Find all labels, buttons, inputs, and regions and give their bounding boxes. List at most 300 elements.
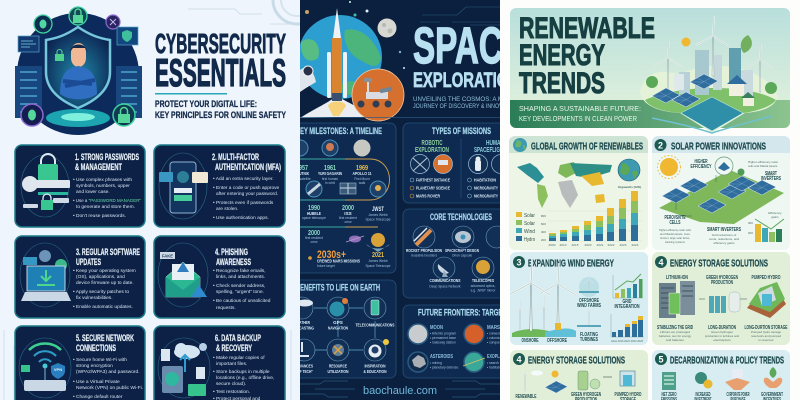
callouts: costs, reductions, and [709,237,739,241]
labels: row two: first resident [339,216,357,220]
target: asteroids: ASTEROIDS [430,354,453,360]
offshore and floating labels: OFFSHORE [579,298,599,304]
title: space exploration [413,26,500,88]
hydrogen production: Green hydrogen [711,330,733,334]
callouts: efficiency gains [713,241,735,245]
offshore and floating labels: FLOATING [580,332,598,338]
subtitle: JOURNEY OF DISCOVERY & INNOVATION [413,103,518,110]
labels: row three: 2030s+ [317,249,346,261]
labels: benefits: OFF TECH" [295,369,313,374]
stacked bar chart: 2020 [585,243,592,247]
heading [75,153,139,170]
pumped hydro: reservoirs and pumped [751,334,781,338]
stacked bar chart: 800 [541,214,546,218]
heading [215,334,261,352]
title: cybersecurity essentials: ESSENTIALS [155,52,286,95]
panel: space exploration [300,0,500,400]
labels: benefits: RESOURCE [329,364,347,368]
number badge: 4 [516,354,522,364]
bullet list: • Enable automatic updates. [73,304,133,310]
stacked bar chart: 2000 [549,243,556,247]
robotic exploration: PLANETARY SCIENCE [416,186,450,190]
title [519,12,655,100]
target: asteroids: • planetary defense [430,366,458,370]
stacked bar chart: 2021 [597,243,604,247]
subtitle: KEY PRINCIPLES FOR ONLINE SAFETY [155,110,286,121]
labels: technologies: advanced optics, [471,284,495,288]
illustration: earth, rocket, moon, mars [298,8,404,121]
title: cybersecurity essentials: CYBERSECURITY [155,28,286,59]
labels: row one: SPUTNIK [295,171,309,176]
target: exoplanets: • search [487,361,499,365]
callouts: SMART INVERTERS [707,227,741,233]
turbines illustration: ONSHORE [522,338,539,344]
labels: benefits: GPS [333,320,343,325]
hydrogen production: production in turbines and [705,334,739,338]
illustration: shield and person [15,7,142,135]
icon: globe [513,138,527,152]
panel: phishing awareness [154,236,285,318]
heading: UPDATES [76,257,101,267]
heading: & MANAGEMENT [75,162,122,172]
bullet list: • Change default router [73,394,123,400]
heading: BENEFITS TO LIFE ON EARTH [296,282,380,292]
hydrogen production: electrolyzers [713,338,731,342]
robotic exploration: EXPLORATION [415,147,449,154]
title: space exploration: EXPLORATION [413,69,519,92]
bullet list [73,177,141,219]
target: exoplanets: EXOPLANETS [487,354,512,360]
bullet list [213,355,274,400]
efficiency bar chart: gains [771,215,779,219]
heading: & RECOVERY [216,343,252,353]
heading [76,248,140,266]
target: exoplanets: • habitable [487,366,503,370]
labels: row two: space telescope [302,216,326,220]
labels: row two [302,205,391,224]
labels: row one: walk [359,181,366,185]
stacked bar chart: 2010 [560,243,567,247]
bullet list: • Use authentication apps. [213,215,269,221]
number badge: 5 [658,354,664,364]
labels: row two: HUBBLE [307,211,321,216]
efficiency bar chart: Efficiency [768,211,782,215]
heading: 3. REGULAR SOFTWARE [76,247,140,257]
labels: technologies: e.g. JWST mirror [471,288,496,292]
labels: technologies: Orion capsule [452,254,472,258]
efficiency bar chart: 400 [748,221,753,225]
subtitle [413,96,500,108]
labels: row two: Space Telescope [365,218,391,222]
labels: technologies: COMMUNICATIONS [430,278,460,283]
icons and labels: CORPORATE POWER [726,392,750,398]
human spaceflight: HABITATION [474,178,497,182]
panel: types of missions [403,123,518,203]
labels: row two: ISS [344,211,352,216]
bullet list: (WPA2/WPA3) and password. [76,369,140,375]
heading: AUTHENTICATION (MFA) [215,162,281,172]
icon: padlock and key [21,154,70,217]
labels: row one: first satellite [293,177,311,181]
title: TRENDS [519,67,605,100]
labels: row three: James Webb [368,259,388,263]
target: mars: • colonization [487,336,507,340]
heading [76,334,134,352]
icons and labels: GOVERNMENT [761,392,783,398]
subtitle: UNVEILING THE COSMOS: A MULTI- [413,96,518,103]
labels: benefits: TELECOMMUNICATIONS [356,322,394,328]
labels: benefits: WEATHER [294,320,310,325]
stacked bar chart: 2015 [572,243,579,247]
bullet list [73,268,136,310]
turbines illustration [511,259,576,344]
bullet list: device firmware up to date. [76,280,134,286]
icons and labels [516,366,642,400]
world map [517,159,640,208]
stacked bar chart: 400 [541,230,546,234]
lithium ion battery racks: Lithium-ion prolonged [660,330,690,334]
heading: GLOBAL GROWTH OF RENEWABLES [531,142,643,152]
stacked bar chart: 2022 [608,243,615,247]
labels: technologies: Deep Space Network [429,284,461,288]
lithium ion battery racks: STABILIZING THE GRID [657,325,693,331]
offshore and floating labels [577,274,601,343]
bullet list: to generate and store them. [76,204,135,210]
bullet list: • Apply security patches to [73,289,129,295]
target: moon [408,324,457,344]
labels: row one: YURI GAGARIN [318,171,342,176]
pumped hydro: PUMPED HYDRO [752,275,781,281]
icon: code screen left [18,36,39,52]
icon: phishing email: FAKE [162,254,173,258]
heading: CONNECTIONS [76,343,116,353]
labels: row two: James Webb [368,213,388,217]
stacked bar chart [541,185,642,247]
callouts: horizon, large solar farms, [660,236,690,240]
bullet list: • Use a "PASSWORD MANAGER" [73,198,141,204]
bullet list: • Secure home Wi-Fi with [73,357,127,363]
lithium ion battery racks: and batteries [666,338,684,342]
bullet list: links, and attachments. [216,274,265,280]
labels: technologies: TELESCOPES [472,278,494,283]
subtitle: KEY DEVELOPMENTS IN CLEAN POWER [519,114,637,123]
number badge: 4 [658,258,664,268]
lithium ion battery racks [657,275,695,342]
subtitle: PROTECT YOUR DIGITAL LIFE: [155,99,257,110]
bullet list: spelling, "urgent" tone. [216,289,264,295]
card: solar power innovations [652,136,790,250]
efficiency bar chart [748,211,784,242]
subtitle: SHAPING A SUSTAINABLE FUTURE: [519,104,641,113]
icon: laptop and gears [20,243,71,307]
icons: technologies [413,226,508,279]
efficiency bar chart: 200 [748,231,753,235]
bullet list: • Use complex phrases with [73,177,132,183]
labels: benefits: INSPIRATION [364,364,386,368]
stacked bar chart: 2024 [632,243,639,247]
card: energy storage bottom [510,350,648,400]
legend: Solar [524,213,535,219]
icon: lock top [69,7,87,25]
heading: CORE TECHNOLOGIES [430,212,492,222]
labels: benefits: FORECASTING [290,326,314,330]
bullet list: and lower case. [76,189,110,195]
labels: technologies: reusable boosters [411,254,437,258]
stacked bar chart: 2023 [620,243,627,247]
callouts: INVERTERS [761,176,781,182]
callouts [659,159,781,245]
wind capacity chart: Glow 2016 2021 2023 2025 [611,339,643,343]
bullet list [73,357,143,400]
panel: renewable energy trends [500,0,800,400]
callouts: tracking systems [665,240,685,244]
callouts: cells and bifacial panels. [748,164,778,168]
hydrogen production: PRODUCTION [711,280,733,286]
legend: Wind [524,229,535,235]
icon: lock on shield [55,50,64,61]
panel: secure network [15,326,145,400]
hydrogen production: GREEN HYDROGEN [706,275,738,281]
number badge: 2 [658,140,663,150]
subtitle [155,100,286,118]
labels: row three: future target [317,264,335,268]
target: moon: MOON [430,325,443,331]
title: cybersecurity essentials [155,28,286,95]
callouts: and bifacial panels, more [660,232,690,236]
panel: key milestones timeline [285,123,396,273]
target: moon: • permanent base [430,336,456,340]
bullet list: • Keep your operating system [73,268,136,274]
human spaceflight: MICROGRAVITY [474,186,498,190]
heading: 1. STRONG PASSWORDS [75,152,139,162]
bullet list: fix vulnerabilities. [76,295,113,301]
subtitle [519,104,641,123]
hydrogen production [705,275,740,342]
card: global growth of renewables [509,136,648,250]
header banner [510,8,790,133]
card: energy storage top [652,252,790,345]
callouts: SMART [765,171,777,177]
icons: benefits [291,297,389,361]
grid integration chart: INTEGRATION [614,304,640,310]
labels: row two: crew [345,220,352,224]
robotic exploration: MARS ROVER [416,194,441,198]
panel: benefits to life on earth [285,280,396,378]
callouts: Grid reductions of [712,233,736,237]
heading: 2. MULTI-FACTOR [212,152,259,162]
target: mars: MARS [487,325,500,331]
labels: benefits: & EDUCATION [364,369,387,374]
icons and labels: NET ZERO [662,392,677,398]
offshore and floating labels: WIND FARMS [577,303,601,309]
bullet list: strong encryption [76,363,113,369]
bullet list: • Check sender address, [213,283,265,289]
target: mars [464,324,507,344]
legend: Solar [524,221,535,227]
labels: row two: 2000 [342,205,354,212]
bullet list: requests. [216,305,236,311]
illustration: green city with turbines [640,16,778,133]
labels: row one [293,165,372,185]
labels: benefits: ADVANCES [295,364,313,368]
icons and labels: GREEN HYDROGEN [571,392,601,398]
icons and labels: RENEWABLE [516,394,537,400]
heading [215,248,251,266]
grid integration chart [613,274,643,310]
panel: future frontiers [403,305,518,378]
icon: bug top [34,15,52,33]
bullet list: • Be cautious of unsolicited [213,298,271,304]
panel: core technologies [403,209,518,298]
icon: screen top right [117,27,138,45]
icon: wifi router: VPN [54,367,62,372]
icons and labels: INCREASED [696,392,711,398]
target: mars: • crewed [487,332,500,336]
callouts: HIGHER [694,159,708,165]
target: asteroids [408,352,458,372]
icon: cloud backup and drive [158,338,210,398]
bullet list: symbols, numbers, upper [76,183,130,189]
heading: 4. PHISHING [215,247,248,257]
heading: ENERGY STORAGE SOLUTIONS [528,356,625,366]
labels: row three: 2000 [308,230,320,237]
icons and labels [661,367,783,400]
labels: row three: Space Telescope [365,264,391,268]
labels: row one: First Moon [354,177,370,181]
number badge: 3 [516,258,522,268]
labels: benefits: UTILIZATION [328,369,349,374]
human spaceflight [468,140,510,198]
labels: row two: 1990 [308,205,320,212]
panel: strong passwords [15,145,145,227]
solar farm illustration [658,156,784,224]
legend: Hydro [524,237,535,243]
heading: EXPANDING WIND ENERGY [528,258,614,270]
target: exoplanets [463,352,512,372]
footer url: baochaule.com [363,385,437,397]
icon: lock bottom [113,104,135,126]
human spaceflight: SPACEFLIGHT [474,147,506,154]
labels: row one: APOLLO 11 [352,171,372,176]
target: asteroids: • mining [430,361,442,365]
bullet list: • Don't reuse passwords. [73,213,126,219]
lithium ion battery racks: LITHIUM-ION [666,275,688,281]
labels: row three: first resident [305,236,323,240]
bullet list: • Test restoration. [213,389,250,395]
labels: row three [305,230,391,268]
pumped hydro [744,275,788,342]
grid integration chart: GRID [622,299,632,305]
callouts: Higher-efficiency solar cells [659,228,691,232]
bullet list: locations (e.g., offline drive, [216,375,274,381]
heading: AWARENESS [216,257,251,267]
turbines illustration: OFFSHORE [547,338,567,344]
callouts: CELLS [670,220,681,226]
bullet list: • Enter a code or push approve [213,185,280,191]
heading: FUTURE FRONTIERS: TARGETS [418,308,510,318]
robotic exploration [410,140,452,198]
labels: technologies: SPACECRAFT DESIGN [445,248,479,253]
icon: phone [159,153,208,219]
robotic exploration: ROBOTIC [422,140,442,147]
card: expanding wind energy [510,252,648,345]
bullet list: • Store backups in multiple [213,369,270,375]
target: mars: • conquest [487,340,503,344]
title: RENEWABLE [519,12,655,45]
labels: row three: CREWED MARS MISSIONS [317,258,360,264]
human spaceflight: HUMAN [486,140,504,147]
labels: technologies [406,248,496,292]
bullet list: secure cloud). [216,381,246,387]
bullet list: • Recognize fake emails, [213,268,266,274]
heading: TYPES OF MISSIONS [432,126,491,136]
stacked bar chart: 200 [541,238,546,242]
labels: benefits: NAVIGATION [328,326,348,330]
labels: row two: JWST [372,206,384,213]
labels: row one: 1957 [296,165,308,172]
labels: row three: crew [311,240,318,244]
legend [516,212,535,243]
bullet list: after entering your password. [216,191,278,197]
heading: 6. DATA BACKUP [215,333,261,343]
bullet list: Network (VPN) on public Wi-Fi. [76,385,143,391]
labels: row one: 1961 [324,165,336,172]
labels: benefits [290,320,394,374]
labels: technologies: ROCKET PROPULSION [406,248,442,253]
heading: 5. SECURE NETWORK [76,333,134,343]
icons: milestones [292,140,390,260]
title: space exploration: SPACE [413,17,525,74]
pumped hydro: Pumped hydro storage [751,330,781,334]
hydrogen production: LONG-DURATION [708,325,736,331]
icon: malware x [106,15,120,29]
stacked bar chart: Gigawatts (GW) [618,185,641,189]
human spaceflight: MICROGRAVITY [474,194,498,198]
heading: KEY MILESTONES: A TIMELINE [296,126,382,136]
labels: row one: first human [322,177,338,181]
bullet list [213,176,280,221]
offshore and floating labels: TURBINES [580,337,598,343]
panel: software updates [15,236,145,318]
target: moon: • Artemis program [430,332,457,336]
labels: row one: 1969 [356,165,368,172]
callouts: EFFICIENCY [690,164,712,170]
panel: data backup [154,326,285,400]
labels: row one: in orbit [325,181,335,185]
callouts: PEROVSKITE [664,215,686,221]
bullet list: • Protects even if passwords [213,200,274,206]
callouts: Higher-efficiency solar [748,160,778,164]
bullet list: • Add an extra security layer. [213,176,274,182]
bullet list: (OS), applications, and [76,274,125,280]
pumped hydro: in reservoir [758,338,774,342]
robotic exploration: FARTHEST DISTANCE [416,178,450,182]
bullet list: • Make regular copies of [213,355,265,361]
labels: row three: 2021 [372,252,384,259]
stacked bar chart: 600 [541,222,546,226]
bullet list: are stolen. [216,206,238,212]
heading [212,152,281,172]
bullet list: • Use a Virtual Private [73,379,120,385]
panel: multi-factor authentication [154,145,285,227]
panel: cybersecurity essentials [0,0,321,400]
card: decarbonization and policy [652,350,790,400]
lithium ion battery racks: batteries, sun for energy [659,334,691,338]
target: moon: • Gateway station [430,340,456,344]
icons and labels: PUMPED HYDRO [614,392,642,398]
bullet list [213,268,271,311]
icon: bug bottom [21,104,43,126]
